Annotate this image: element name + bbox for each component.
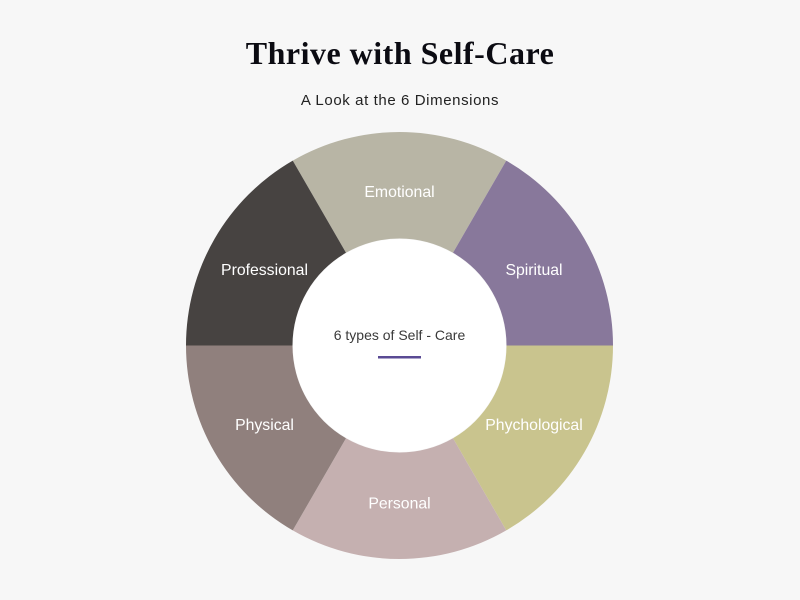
segment: Professional — [186, 161, 346, 346]
segment: Spiritual — [453, 161, 613, 346]
subtitle: A Look at the 6 Dimensions — [301, 92, 499, 108]
segment: Personal: Personal — [368, 496, 431, 512]
segment: Emotional: Emotional — [364, 184, 435, 201]
segment: Phychological: Phychological — [485, 417, 583, 434]
segment: Emotional — [293, 132, 506, 253]
segment: Professional: Professional — [221, 262, 308, 279]
segment: Phychological — [453, 346, 613, 530]
segment: Physical: Physical — [235, 417, 294, 434]
title: Thrive with Self-Care — [246, 35, 554, 71]
center circle — [293, 239, 506, 452]
center circle: 6 types of Self - Care — [334, 327, 465, 343]
segment: Spiritual: Spiritual — [505, 262, 563, 279]
segment: Physical — [186, 346, 346, 530]
segment: Personal — [293, 438, 506, 559]
